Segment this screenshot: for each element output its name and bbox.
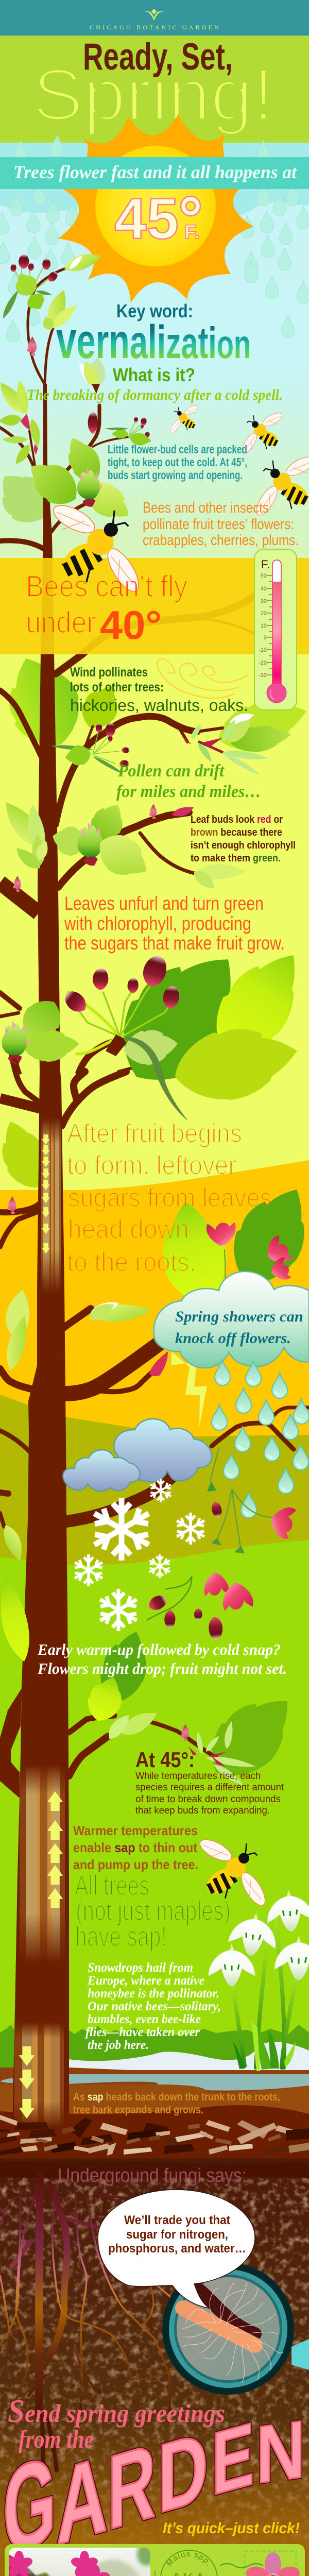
text: flower-bud cells: Little flower-bud cells are packed <box>108 443 247 456</box>
branch blossoms and leaves at mid tree <box>52 710 293 777</box>
speech bubble: sugar for nitrogen, <box>126 2228 228 2242</box>
raindrops in the sky <box>0 134 309 342</box>
text: leaf buds: isn’t enough chlorophyll <box>191 840 296 851</box>
speech bubble: We’ll trade you that <box>124 2213 230 2227</box>
text: warmer temperatures: Warmer temperatures <box>73 1823 198 1838</box>
photo: crabapple blossoms <box>9 2548 150 2576</box>
back leaves behind the tree <box>0 461 309 1793</box>
thermometer: -20 <box>259 660 267 666</box>
red bud on branch <box>149 1351 168 1376</box>
text: snowdrops: Our native bees—solitary, <box>88 1999 221 2013</box>
thermometer: 30 <box>261 598 267 604</box>
text: early warm-up: Early warm-up followed by cold snap? <box>37 1640 281 1658</box>
text: wind pollinates: Wind pollinates <box>70 665 148 680</box>
top twig leaves, flowers and buds <box>1 249 106 394</box>
spring showers text: Spring showers can <box>175 1308 303 1325</box>
text: at 45 degrees: species requires a different amount <box>135 1782 284 1793</box>
text: snowdrops: Europe, where a native <box>87 1974 204 1988</box>
hanging buds and blossoms <box>146 1448 298 1640</box>
what is it heading: What is it? <box>113 364 195 385</box>
logo text: CHICAGO BOTANIC GARDEN <box>90 24 219 31</box>
grey storm clouds <box>63 1419 212 1491</box>
text: bees and insects <box>143 500 299 549</box>
text: all trees have sap: All trees <box>75 1870 149 1901</box>
text: early warm-up <box>37 1640 287 1677</box>
icon: botanic garden logo <box>144 9 165 21</box>
text: after fruit begins: sugars from leaves <box>68 1183 272 1212</box>
text: leaf buds <box>191 814 296 864</box>
tree branches <box>0 265 309 1776</box>
text: all trees have sap: have sap! <box>75 1921 167 1952</box>
thermometer: F. <box>261 558 270 571</box>
text: at 45 degrees: of time to break down compounds <box>135 1794 281 1805</box>
postmark: Malus spp. AKA Crabapples: Malus spp. <box>166 2552 208 2566</box>
big 45 degrees F: F. <box>184 222 200 243</box>
sap stripes: sap returning to roots <box>14 2022 64 2128</box>
root hairs <box>183 2282 283 2383</box>
thermometer: -30 <box>259 672 267 679</box>
background: sky gradient <box>0 143 309 558</box>
text: flower-bud cells <box>108 443 247 482</box>
text: bees can't fly under 40: Bees can’t fly <box>26 570 187 603</box>
magnifying glass with root hairs <box>162 2263 309 2395</box>
heading: big perspective GARDEN: D <box>158 2411 208 2534</box>
snowflakes <box>73 1479 207 1631</box>
sap stripes: upper trunk, flowing down <box>41 1118 61 1293</box>
sun spikes over the title <box>84 114 224 144</box>
text: at 45 degrees: While temperatures rise, each <box>135 1771 261 1782</box>
soil panel with gradient down to the postcards <box>0 2159 309 2576</box>
text: bees can't fly under 40: under <box>26 606 96 639</box>
background: seasonal hills <box>0 654 309 2164</box>
spring showers text: knock off flowers. <box>175 1330 291 1347</box>
text: all trees have sap <box>75 1870 231 1952</box>
heading: big perspective GARDEN: R <box>108 2422 156 2552</box>
text: sap heads back down: As sap heads back down the trunk to the roots, <box>73 2091 280 2103</box>
upper-left leaves and leaf cluster <box>0 796 246 893</box>
ground layers <box>0 2067 309 2117</box>
text: leaves unfurl <box>64 893 285 954</box>
tagline: it's quick: It’s quick–just click! <box>163 2520 300 2537</box>
sap stripes: rising sap <box>20 1765 65 1963</box>
lightning bolt <box>171 1351 207 1427</box>
snow band <box>68 2042 309 2071</box>
postmark: Malus spp. AKA Crabapples <box>160 2550 218 2576</box>
mulch chips <box>0 2115 309 2156</box>
tree roots <box>0 2174 174 2470</box>
text: snowdrops: Snowdrops hail from <box>88 1961 193 1975</box>
thermometer: 50 <box>261 573 267 579</box>
stamp: crabapple flower <box>220 2551 302 2576</box>
text: at 45 degrees <box>135 1748 284 1816</box>
thermometer: 0 <box>264 635 267 641</box>
large spring leaves on the trunk <box>20 431 138 528</box>
text: wind pollinates: lots of other trees: <box>70 680 164 694</box>
definition: The breaking of dormancy after a cold spell. <box>27 386 283 403</box>
heading: big perspective GARDEN: G <box>3 2430 56 2576</box>
heading: underground fungi says: Underground fungi says: <box>58 2165 247 2187</box>
text: bees and insects: Bees and other insects <box>143 500 269 516</box>
text: pollen can drift: Pollen can drift <box>117 761 225 781</box>
background: upper rain cloud <box>0 143 309 216</box>
text: flower-bud cells: tight, to keep out the cold. At 45°, <box>108 455 247 469</box>
text: snowdrops <box>85 1961 221 2052</box>
big 45 degrees F: 45 <box>114 187 179 251</box>
text: at 45 degrees: that keep buds from expanding. <box>135 1805 270 1816</box>
left twig leaves and red buds <box>0 378 98 467</box>
heading: big perspective GARDEN <box>3 2403 305 2576</box>
text: pollen can drift: for miles and miles… <box>116 782 261 801</box>
large blossom group with green leaves <box>2 928 309 1214</box>
text: sap heads back down: tree bark expands and grows. <box>73 2104 203 2116</box>
wind swirls <box>157 659 249 698</box>
panel: title green band <box>0 36 309 143</box>
subtitle text: Trees flower fast and it all happens at <box>13 162 297 182</box>
bees flying in the sky <box>49 404 309 596</box>
raindrops <box>212 1360 309 1518</box>
band: bees can't fly under 40 <box>0 558 309 654</box>
text: after fruit begins: head down <box>68 1214 189 1244</box>
text: snowdrops: honeybee is the pollinator. <box>88 1987 219 2001</box>
spring showers text <box>175 1308 303 1347</box>
text: sap heads back down <box>73 2091 280 2116</box>
text: snowdrops: bumbles, even bee-like <box>88 2012 201 2026</box>
text: leaves unfurl: Leaves unfurl and turn green <box>64 893 264 914</box>
panel: spring showers cloud <box>154 1272 309 1368</box>
text: leaf buds: brown because there <box>191 827 282 838</box>
text: after fruit begins: to the roots. <box>67 1247 196 1277</box>
text: all trees have sap: (not just maples) <box>76 1895 231 1926</box>
speech bubble <box>98 2190 255 2308</box>
text: snowdrops: the job here. <box>88 2038 149 2052</box>
tree trunk <box>13 384 69 2159</box>
arrows: sap goes up <box>47 1791 63 1908</box>
panel: teal subtitle band <box>0 157 309 189</box>
text: wind pollinates: hickories, walnuts, oaks. <box>70 696 248 715</box>
arrows: sap heads down <box>19 2046 35 2119</box>
spring title text: Spring! <box>32 54 274 136</box>
thermometer: 10 <box>261 623 267 629</box>
text: bees can't fly under 40: 40° <box>100 602 162 648</box>
header: teal logo band <box>0 0 309 36</box>
key word heading block: Key word: <box>116 300 193 321</box>
thermometer: -10 <box>259 647 267 653</box>
speech bubble: phosphorus, and water… <box>108 2242 246 2256</box>
text: at 45 degrees: At 45°: <box>135 1748 195 1772</box>
text: leaf buds: to make them green. <box>191 853 281 864</box>
sun <box>58 114 253 303</box>
heading: big perspective GARDEN: E <box>212 2403 254 2514</box>
vernalization word with gradient and perspective sizes: vernalization <box>56 311 251 369</box>
heading: send spring greetings <box>8 2393 225 2453</box>
heading: send spring greetings: Send spring greetings <box>8 2393 225 2429</box>
text: early warm-up: Flowers might drop; fruit might not set. <box>37 1659 287 1677</box>
text: warmer temperatures: and pump up the tree. <box>73 1857 198 1872</box>
text: pollen can drift <box>116 761 261 801</box>
tulip blossoms and leaves near the cloud <box>0 1174 309 1563</box>
thermometer: 40 <box>261 586 267 592</box>
text: after fruit begins <box>67 1118 272 1277</box>
bee near snowdrops <box>197 1836 269 1909</box>
snowdrop flowers <box>209 1886 309 2071</box>
text: leaf buds: Leaf buds look red or <box>191 814 283 825</box>
key word heading block <box>27 300 283 403</box>
text: snowdrops: flies—have taken over <box>85 2025 200 2039</box>
text: after fruit begins: After fruit begins <box>67 1118 242 1148</box>
text: warmer temperatures <box>73 1823 198 1872</box>
text: warmer temperatures: enable sap to thin out <box>73 1840 197 1855</box>
tree left root-flare arm <box>0 1688 22 1798</box>
postcard: crabapples <box>2 2543 307 2576</box>
small flower cluster near text <box>105 417 152 447</box>
text: wind pollinates <box>70 665 248 715</box>
heading: send spring greetings: from the <box>19 2425 94 2453</box>
lower green leaves and branch blossoms <box>0 1573 256 1788</box>
heading: big perspective GARDEN: N <box>256 2403 305 2501</box>
text: flower-bud cells: buds start growing and opening. <box>108 468 243 482</box>
thermometer: 20 <box>261 611 267 617</box>
heading: big perspective GARDEN: A <box>56 2433 108 2568</box>
arrows: sugars flow down <box>42 1134 50 1253</box>
dark green jagged hill <box>0 2025 309 2071</box>
text: after fruit begins: to form, leftover <box>67 1150 236 1180</box>
divider <box>154 2571 156 2576</box>
text: leaves unfurl: with chlorophyll, producing <box>64 913 251 934</box>
text: bees can't fly under 40 <box>26 570 187 648</box>
spring title text: Ready, Set, <box>83 36 233 78</box>
thermometer <box>254 549 297 710</box>
